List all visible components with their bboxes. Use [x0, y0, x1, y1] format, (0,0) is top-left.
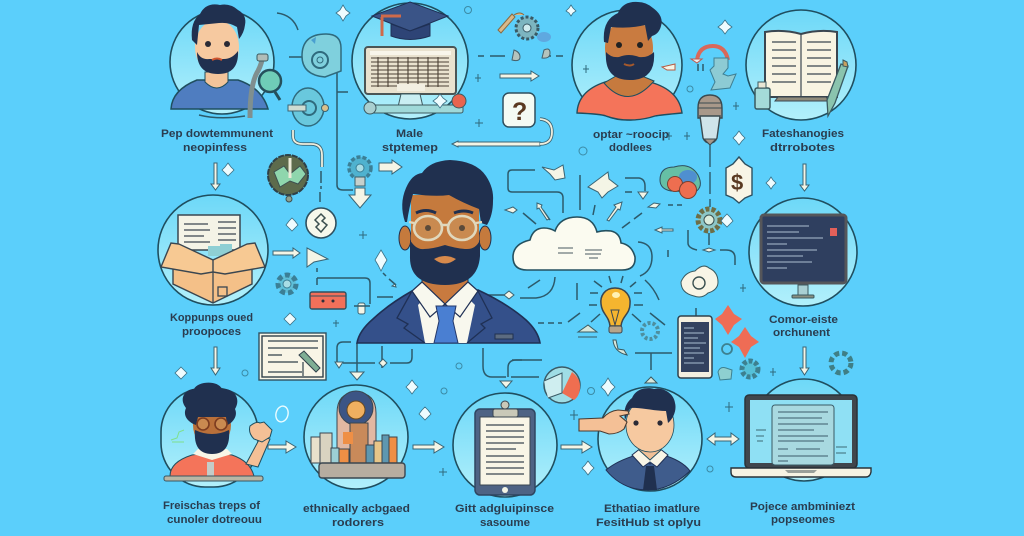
icon: red sparkles — [715, 305, 759, 358]
panel: code monitor — [749, 198, 857, 306]
icon: question mark box — [503, 93, 535, 127]
heading: label 7: cunoler dotreouu — [167, 514, 262, 526]
icon: dollar tag — [726, 157, 752, 203]
icon: small triangle markers — [578, 325, 657, 383]
icon: question mark box: ? — [512, 98, 527, 126]
icon: dollar tag: $ — [731, 170, 743, 195]
panel: clipboard document — [453, 393, 557, 497]
icon: colored blobs — [660, 166, 700, 198]
icon: puzzle gear left — [278, 275, 296, 293]
heading: label 6: orchunent — [773, 327, 830, 339]
heading: label 4: dtrrobotes — [770, 142, 835, 154]
panel: laptop — [731, 379, 871, 481]
icon: globe map — [268, 155, 308, 202]
heading: label 2: Male — [396, 128, 423, 140]
heading: label 10 — [596, 503, 701, 529]
panel: graduation and computer — [352, 2, 468, 119]
panel: top-left person — [170, 4, 281, 118]
heading: label 9: Gitt adgluipinsce — [455, 503, 554, 515]
heading: label 2: stptemep — [382, 142, 438, 154]
icon: smartphone — [678, 316, 712, 378]
icon: document with pen — [259, 333, 326, 380]
heading: label 9: sasoume — [480, 517, 530, 529]
icon: gear with arrow — [349, 157, 371, 186]
heading: label 5: proopoces — [182, 326, 241, 338]
heading: label 3: optar ~roocip — [593, 129, 669, 141]
heading: label 10: Ethatiao imatlure — [604, 503, 700, 515]
heading: label 5: Koppunps oued — [170, 312, 253, 324]
icon: ornate gear — [698, 209, 720, 231]
heading: label 10: FesitHub st oplyu — [596, 517, 701, 529]
heading: label 6 — [769, 314, 838, 339]
heading: label 3 — [593, 129, 669, 154]
heading: label 8: ethnically acbgaed — [303, 503, 410, 515]
heading: label 3: dodlees — [609, 142, 652, 154]
icon: trophy arc — [691, 46, 736, 90]
icon: sync circle — [306, 208, 336, 238]
panel: person with glasses at desk — [161, 383, 290, 487]
icon: microphone — [698, 95, 722, 207]
heading: label 1: neopinfess — [183, 142, 247, 154]
heading: label 11 — [750, 501, 855, 526]
heading: label 7: Freischas treps of — [163, 500, 260, 512]
arrows — [211, 71, 809, 453]
icon: spiral badges — [288, 34, 341, 126]
heading: label 9 — [455, 503, 554, 529]
icon: small marker — [354, 303, 370, 314]
connector lines — [277, 13, 735, 377]
decorative sparkles — [175, 5, 776, 476]
heading: label 6: Comor-eiste — [769, 314, 838, 326]
icon: red browser window — [310, 292, 346, 309]
panel: cardboard box — [158, 195, 268, 305]
panel: bookshelf city — [304, 385, 408, 489]
cloud — [513, 217, 635, 270]
heading: label 11: popseomes — [771, 514, 835, 526]
heading: label 2 — [382, 128, 438, 154]
panel: top-middle person — [572, 2, 682, 120]
heading: label 4 — [762, 128, 844, 154]
heading: label 8 — [303, 503, 410, 529]
icon: white rosette — [681, 266, 718, 297]
central person — [357, 160, 540, 343]
heading: label 8: rodorers — [332, 517, 384, 529]
panel: person with hand at eye — [579, 387, 702, 491]
heading: label 5 — [170, 312, 253, 338]
light bulb — [589, 276, 643, 333]
icon: pie chart — [544, 367, 580, 403]
panel: open book — [746, 10, 856, 120]
icon: gear cluster top — [498, 13, 551, 61]
heading: label 11: Pojece ambminiezt — [750, 501, 855, 513]
heading: label 4: Fateshanogies — [762, 128, 844, 140]
heading: label 1: Pep dowtemmunent — [161, 128, 273, 140]
icon: small gears right — [642, 323, 851, 380]
heading: label 1 — [161, 128, 273, 154]
heading: label 7 — [163, 500, 262, 526]
